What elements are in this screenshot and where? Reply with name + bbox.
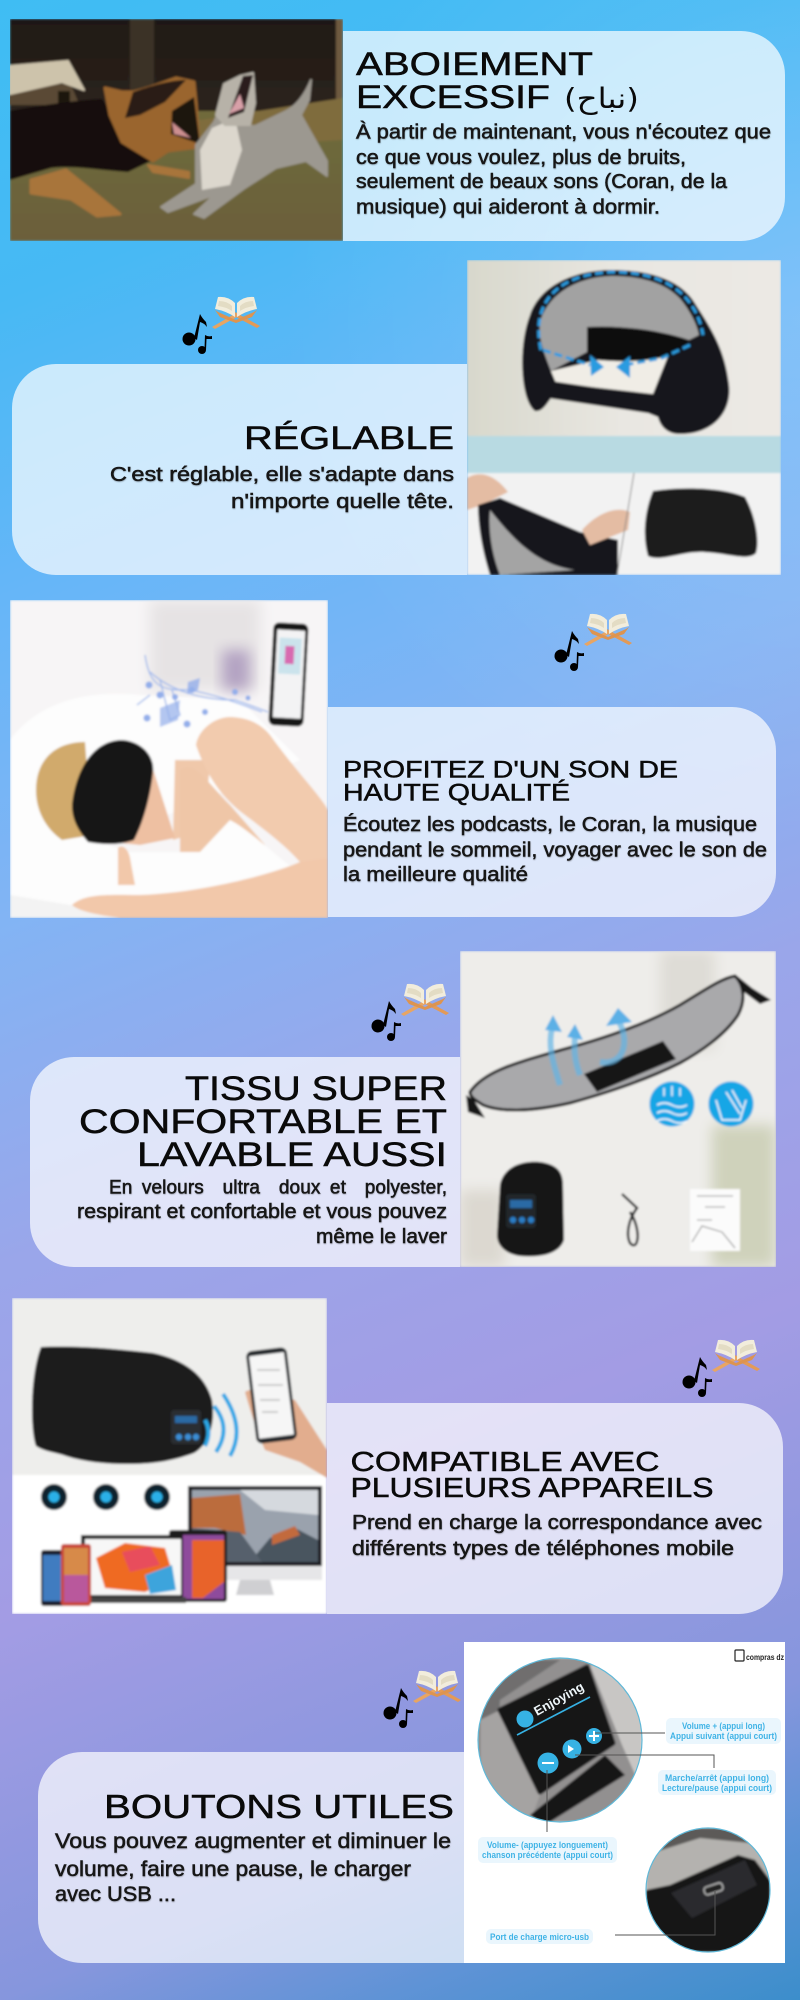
title: compatible bbox=[350, 1446, 714, 1503]
text: réglable description: C'est réglable, elle s'adapte dans bbox=[110, 464, 454, 486]
illustration: control patch bbox=[478, 1658, 642, 1825]
card: aboiement bbox=[343, 31, 785, 241]
title: aboiement excessif: EXCESSIF bbox=[356, 79, 550, 115]
title: aboiement excessif: ABOIEMENT bbox=[356, 46, 593, 82]
illustration: micro-usb port bbox=[646, 1828, 770, 1952]
text: réglable description bbox=[110, 464, 454, 513]
photo: washable fabric mask bbox=[460, 950, 776, 1267]
text: tissu description: même le laver bbox=[316, 1226, 447, 1248]
text: compatible description bbox=[352, 1512, 762, 1560]
callout: volume plus bbox=[666, 1718, 781, 1744]
text: boutons description: volume, faire une pause, le charger bbox=[55, 1858, 411, 1881]
diagram: button functions bbox=[464, 1642, 785, 1963]
text: son description: pendant le sommeil, voyager avec le son de bbox=[343, 840, 767, 862]
text: compatible description: différents types de téléphones mobile bbox=[352, 1538, 734, 1560]
callout: volume minus bbox=[478, 1837, 617, 1863]
panel: aboiement excessif bbox=[10, 19, 785, 241]
logo: compras dz bbox=[735, 1650, 784, 1662]
photo: adjustable mask bbox=[467, 260, 781, 575]
text: tissu description: respirant et confortable et vous pouvez bbox=[77, 1201, 447, 1223]
callout: marche arrêt bbox=[658, 1770, 776, 1795]
callout: volume plus: Volume + (appui long) bbox=[682, 1721, 765, 1732]
text: aboiement description: musique) qui aideront à dormir. bbox=[356, 196, 660, 218]
card: réglable bbox=[12, 364, 467, 575]
icon: music and quran bbox=[372, 984, 449, 1041]
title: son de haute qualité: PROFITEZ D'UN SON DE bbox=[343, 756, 678, 784]
callout: volume minus: chanson précédente (appui court) bbox=[482, 1850, 613, 1861]
title: boutons utiles: BOUTONS UTILES bbox=[104, 1788, 454, 1825]
text: réglable description: n'importe quelle tête. bbox=[231, 491, 454, 513]
title: tissu confortable bbox=[79, 1070, 447, 1174]
title: tissu confortable: CONFORTABLE ET bbox=[79, 1103, 447, 1141]
text: tissu description bbox=[77, 1178, 447, 1248]
text: boutons description: avec USB ... bbox=[55, 1883, 176, 1906]
title: compatible: COMPATIBLE AVEC bbox=[350, 1446, 660, 1477]
panel: compatible bbox=[12, 1298, 783, 1614]
logo: compras dz: compras dz bbox=[746, 1653, 784, 1662]
illustration: control patch: Enjoying bbox=[531, 1679, 587, 1719]
text: aboiement description bbox=[356, 120, 771, 218]
panel: réglable bbox=[12, 260, 781, 575]
text: son description: Écoutez les podcasts, le Coran, la musique bbox=[343, 813, 757, 836]
title: réglable: RÉGLABLE bbox=[244, 420, 454, 456]
title: son de haute qualité bbox=[343, 756, 678, 807]
text: aboiement description: ce que vous voulez, plus de bruits, bbox=[356, 147, 686, 169]
text: son description bbox=[343, 813, 767, 886]
icon: music and quran bbox=[182, 297, 260, 354]
card: tissu bbox=[30, 1057, 460, 1267]
text: compatible description: Prend en charge la correspondance avec bbox=[352, 1512, 762, 1534]
icon: music and quran bbox=[682, 1340, 760, 1397]
text: aboiement description: À partir de maintenant, vous n'écoutez que bbox=[356, 120, 771, 144]
card: compatible bbox=[327, 1403, 783, 1614]
photo: barking dogs bbox=[10, 19, 343, 241]
icon: music and quran bbox=[554, 614, 632, 671]
panel: son de haute qualité bbox=[10, 600, 776, 918]
title: aboiement excessif: (نباح) bbox=[564, 82, 639, 115]
card: son bbox=[328, 707, 776, 917]
title: tissu confortable: TISSU SUPER bbox=[185, 1070, 447, 1108]
title: aboiement excessif bbox=[356, 46, 639, 115]
callout: port bbox=[486, 1929, 593, 1944]
panel: tissu confortable bbox=[30, 950, 776, 1267]
text: boutons description: Vous pouvez augmenter et diminuer le bbox=[55, 1830, 451, 1853]
text: tissu description: En velours ultra doux et polyester, bbox=[109, 1178, 447, 1198]
callout: marche arrêt: Lecture/pause (appui court) bbox=[662, 1783, 772, 1794]
callout: volume minus: Volume- (appuyez longuement) bbox=[487, 1840, 608, 1851]
callout: marche arrêt: Marche/arrêt (appui long) bbox=[665, 1773, 769, 1784]
card: boutons bbox=[38, 1752, 464, 1963]
photo: woman sleeping with mask bbox=[10, 600, 330, 918]
icon: music and quran bbox=[384, 1671, 461, 1728]
callout lines bbox=[547, 1733, 715, 1935]
callout: volume plus: Appui suivant (appui court) bbox=[670, 1731, 777, 1742]
text: son description: la meilleure qualité bbox=[343, 864, 528, 886]
photo: mask with devices bbox=[12, 1298, 327, 1614]
title: tissu confortable: LAVABLE AUSSI bbox=[137, 1136, 447, 1174]
title: son de haute qualité: HAUTE QUALITÉ bbox=[343, 780, 570, 807]
panel: boutons utiles bbox=[38, 1642, 785, 1963]
title: compatible: PLUSIEURS APPAREILS bbox=[350, 1472, 714, 1503]
callout: port: Port de charge micro-usb bbox=[490, 1932, 589, 1943]
text: aboiement description: seulement de beaux sons (Coran, de la bbox=[356, 171, 728, 193]
text: boutons description bbox=[55, 1830, 451, 1906]
